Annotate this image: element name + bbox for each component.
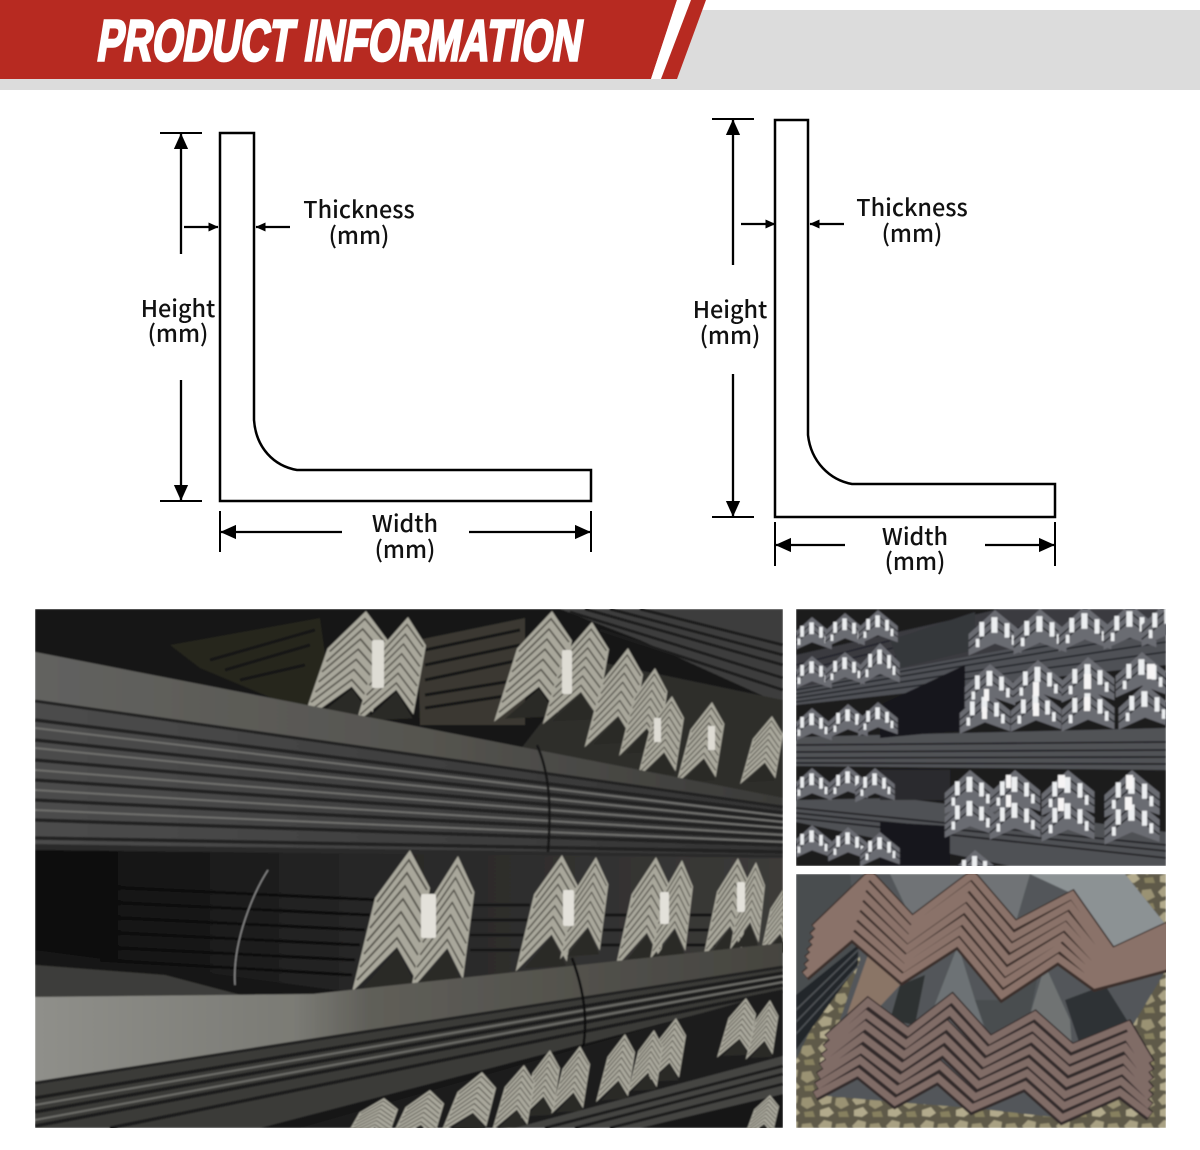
header red panel — [0, 0, 677, 79]
diagram: left angle profile — [141, 133, 591, 565]
photo: stacked angle steel warehouse — [35, 609, 795, 1141]
lower pale bundles — [35, 964, 238, 997]
height dimension — [693, 119, 767, 517]
width dimension: (mm) — [375, 531, 435, 565]
header grey band — [0, 10, 1200, 90]
angle outline — [775, 120, 1055, 517]
header banner — [0, 0, 1200, 90]
wire — [235, 870, 268, 985]
height dimension: Height — [141, 290, 215, 324]
bundles bodies — [880, 665, 965, 738]
photo: outdoor stock rows — [796, 609, 1166, 866]
upper chevron stacks — [302, 611, 388, 722]
steel faces — [815, 874, 1166, 1118]
thickness dimension: Thickness — [856, 189, 968, 223]
width dimension: Width — [372, 505, 438, 539]
upper zigzag stack — [805, 875, 1170, 996]
width dimension: (mm) — [885, 543, 945, 577]
upper bundles body — [172, 618, 325, 704]
height dimension — [141, 133, 215, 501]
middle chevron stacks — [352, 850, 430, 992]
long beams — [796, 609, 1166, 688]
lower right chevron stacks — [717, 998, 756, 1058]
header white slash — [651, 0, 691, 79]
upper right bundle — [560, 609, 783, 705]
thickness dimension — [741, 189, 968, 249]
gravel background — [796, 874, 1166, 1128]
middle bundle body — [35, 850, 783, 992]
main long beam — [35, 702, 783, 855]
tags — [982, 664, 1155, 811]
diagram: right angle profile — [693, 119, 1055, 577]
tags — [372, 640, 715, 750]
height dimension: (mm) — [148, 315, 208, 349]
chevron rows — [796, 609, 1166, 866]
width dimension — [775, 518, 1055, 577]
lower long beam — [35, 968, 783, 1128]
angle outline — [220, 133, 591, 501]
thickness dimension: (mm) — [329, 217, 389, 251]
wire tie lower — [572, 958, 585, 1048]
photo: rusty angle steel close-up — [796, 874, 1170, 1128]
steel faces lower — [846, 956, 900, 1014]
lower zigzag stack — [815, 998, 1150, 1119]
lower right bundle dark — [392, 998, 781, 1128]
thickness dimension: Thickness — [303, 191, 415, 225]
tags — [421, 882, 745, 938]
thickness dimension: (mm) — [882, 215, 942, 249]
thickness dimension — [184, 191, 415, 251]
title: PRODUCT INFORMATION — [93, 9, 588, 73]
width dimension — [220, 505, 591, 565]
height dimension: Height — [693, 291, 767, 325]
height dimension: (mm) — [700, 317, 760, 351]
header red slash — [661, 0, 706, 79]
width dimension: Width — [882, 518, 948, 552]
left steel stack — [796, 874, 860, 1060]
wire tie — [537, 745, 550, 852]
lowest beam — [515, 1056, 783, 1128]
